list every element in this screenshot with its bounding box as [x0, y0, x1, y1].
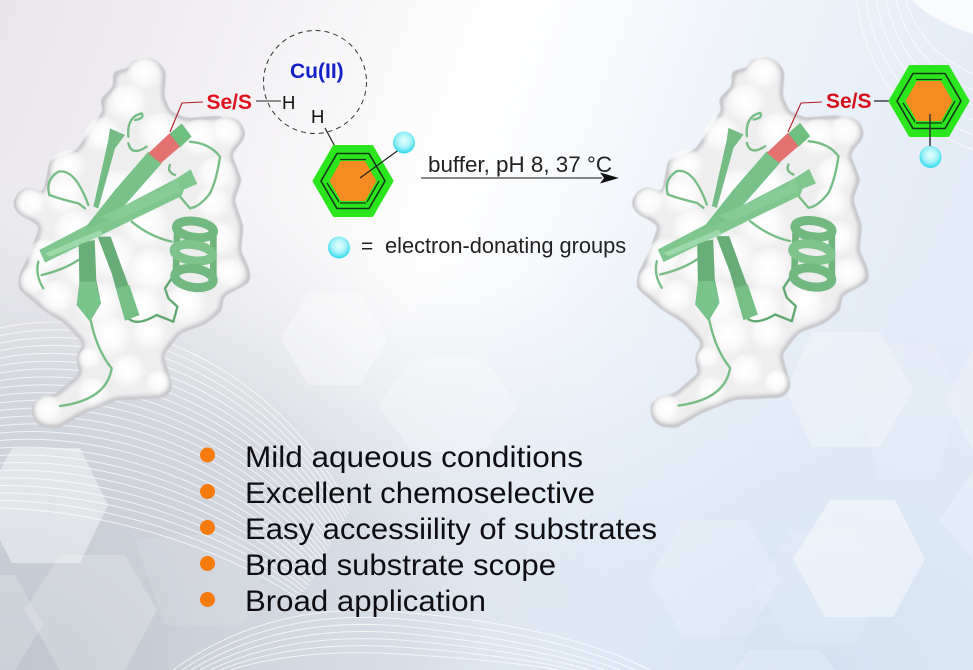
- protein left: [13, 57, 250, 429]
- Cu(II) dashed circle: Cu(II): [290, 60, 344, 83]
- product label with aryl group: [788, 66, 968, 168]
- Se/S left label with bond: H: [282, 92, 295, 113]
- bullet list: [200, 441, 657, 618]
- bullet 2: Excellent chemoselective: [245, 477, 595, 510]
- protein right: [632, 56, 869, 428]
- aryl substrate with H and donating group: [311, 106, 415, 216]
- legend: electron-donating groups: electron-donating groups: [385, 233, 626, 258]
- bullet 3: Easy accessiility of substrates: [245, 513, 657, 546]
- Cu(II) dashed circle: [264, 30, 366, 134]
- legend: electron-donating groups: =: [361, 235, 373, 258]
- bullet 5: Broad application: [245, 585, 486, 618]
- Se/S left label with bond: [170, 91, 295, 132]
- Se/S left label with bond: Se/S: [206, 91, 252, 114]
- product label with aryl group: Se/S: [826, 90, 872, 113]
- aryl substrate with H and donating group: H: [311, 106, 324, 127]
- bullet 4: Broad substrate scope: [245, 549, 556, 582]
- reaction arrow with conditions: buffer, pH 8, 37 °C: [428, 152, 612, 177]
- bullet 1: Mild aqueous conditions: [245, 441, 583, 474]
